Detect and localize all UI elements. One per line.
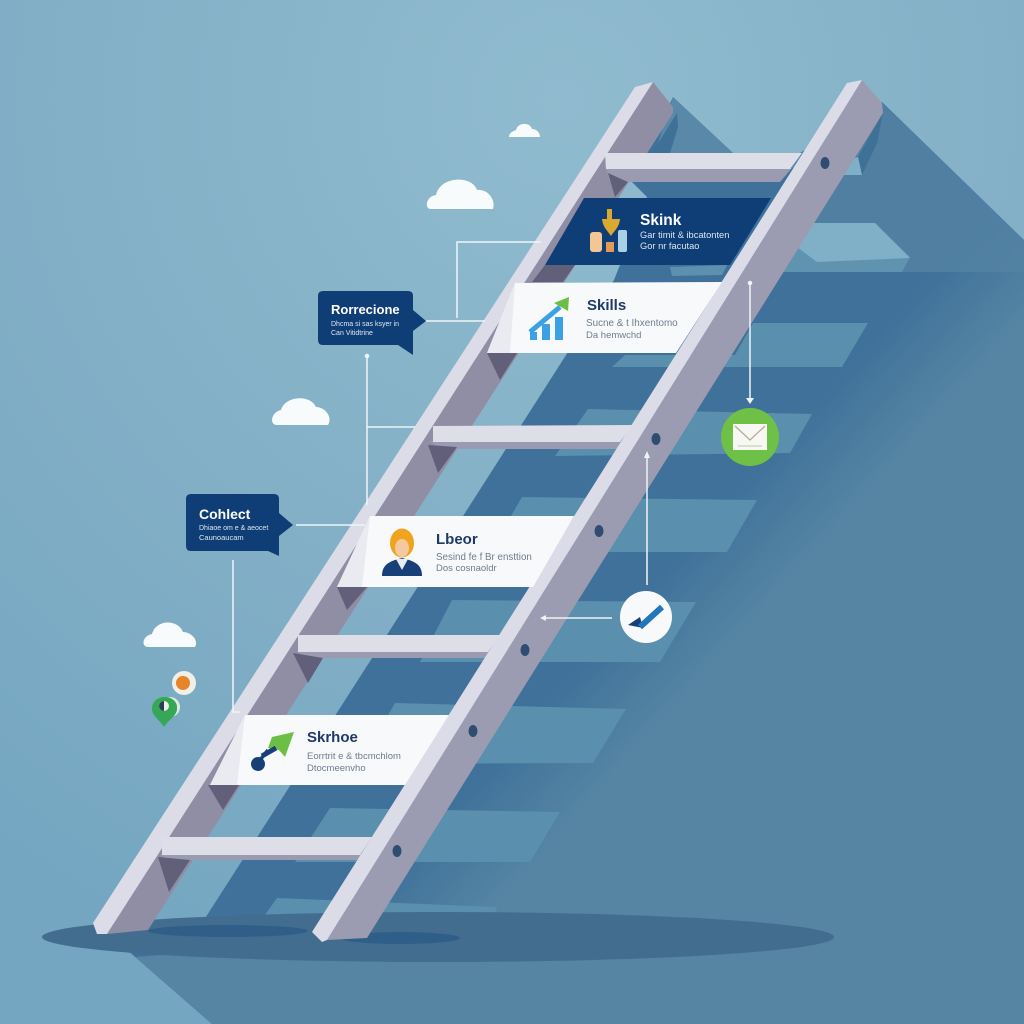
icon: green mail circle [721,408,779,466]
card heading: Skrhoe [307,729,358,746]
card description: Gor nr facutao [640,241,699,251]
rail wedges under cards [208,265,575,810]
cloud 4 [143,622,196,647]
card: Lbeor [337,516,574,587]
callout: Rorrecione: Dhcma si sas ksyer in [331,321,399,328]
icon: trophy and blocks [590,209,627,252]
card: Skink [545,198,771,265]
card description: Gar timit & ibcatonten [640,230,729,240]
cloud 3 [272,398,330,425]
rung 2 [428,425,633,473]
card description [586,318,678,341]
icon: green map pin [152,697,180,727]
left rail [93,82,673,934]
card description [436,552,532,574]
cloud 1 [509,124,540,137]
rung 3 [293,635,500,683]
card description: Dtocmeenvho [307,763,366,774]
card: Skills [487,282,722,353]
rung 1 [605,153,802,197]
rail bolts [392,157,830,857]
icon: orange badge [172,671,196,695]
cloud 2 [427,180,494,209]
callout: Rorrecione [318,291,426,355]
callout: Rorrecione: Rorrecione [331,302,400,317]
ground shadow ellipse [42,912,834,962]
card description: Da hemwchd [586,330,641,341]
card: Skrhoe [210,715,449,785]
card heading: Lbeor [436,531,478,548]
callout: Cohlect [186,494,293,556]
shadow stripes of the rungs [260,223,910,922]
card description: Sucne & t Ihxentomo [586,318,678,329]
card description [307,751,401,774]
icon: growth chart [530,297,569,340]
icon: rocket [251,732,294,771]
card heading: Skink [640,212,682,229]
rung 4 [158,837,372,892]
card description: Sesind fe f Br ensttion [436,552,532,563]
card heading: Skills [587,297,626,314]
icon: white check circle [620,591,672,643]
icon: person [382,528,422,576]
callout: Cohlect: Dhiaoe om e & aeocet [199,525,268,532]
callout: Rorrecione: Can Vitidtrine [331,330,373,337]
card description: Eorrtrit e & tbcmchlom [307,751,401,762]
ladder [93,80,883,942]
card description [640,230,729,251]
right rail [312,80,883,942]
callout: Cohlect: Caunoaucam [199,533,244,542]
card description: Dos cosnaoldr [436,563,497,574]
callout: Cohlect: Cohlect [199,506,251,522]
connector lines [233,242,754,712]
